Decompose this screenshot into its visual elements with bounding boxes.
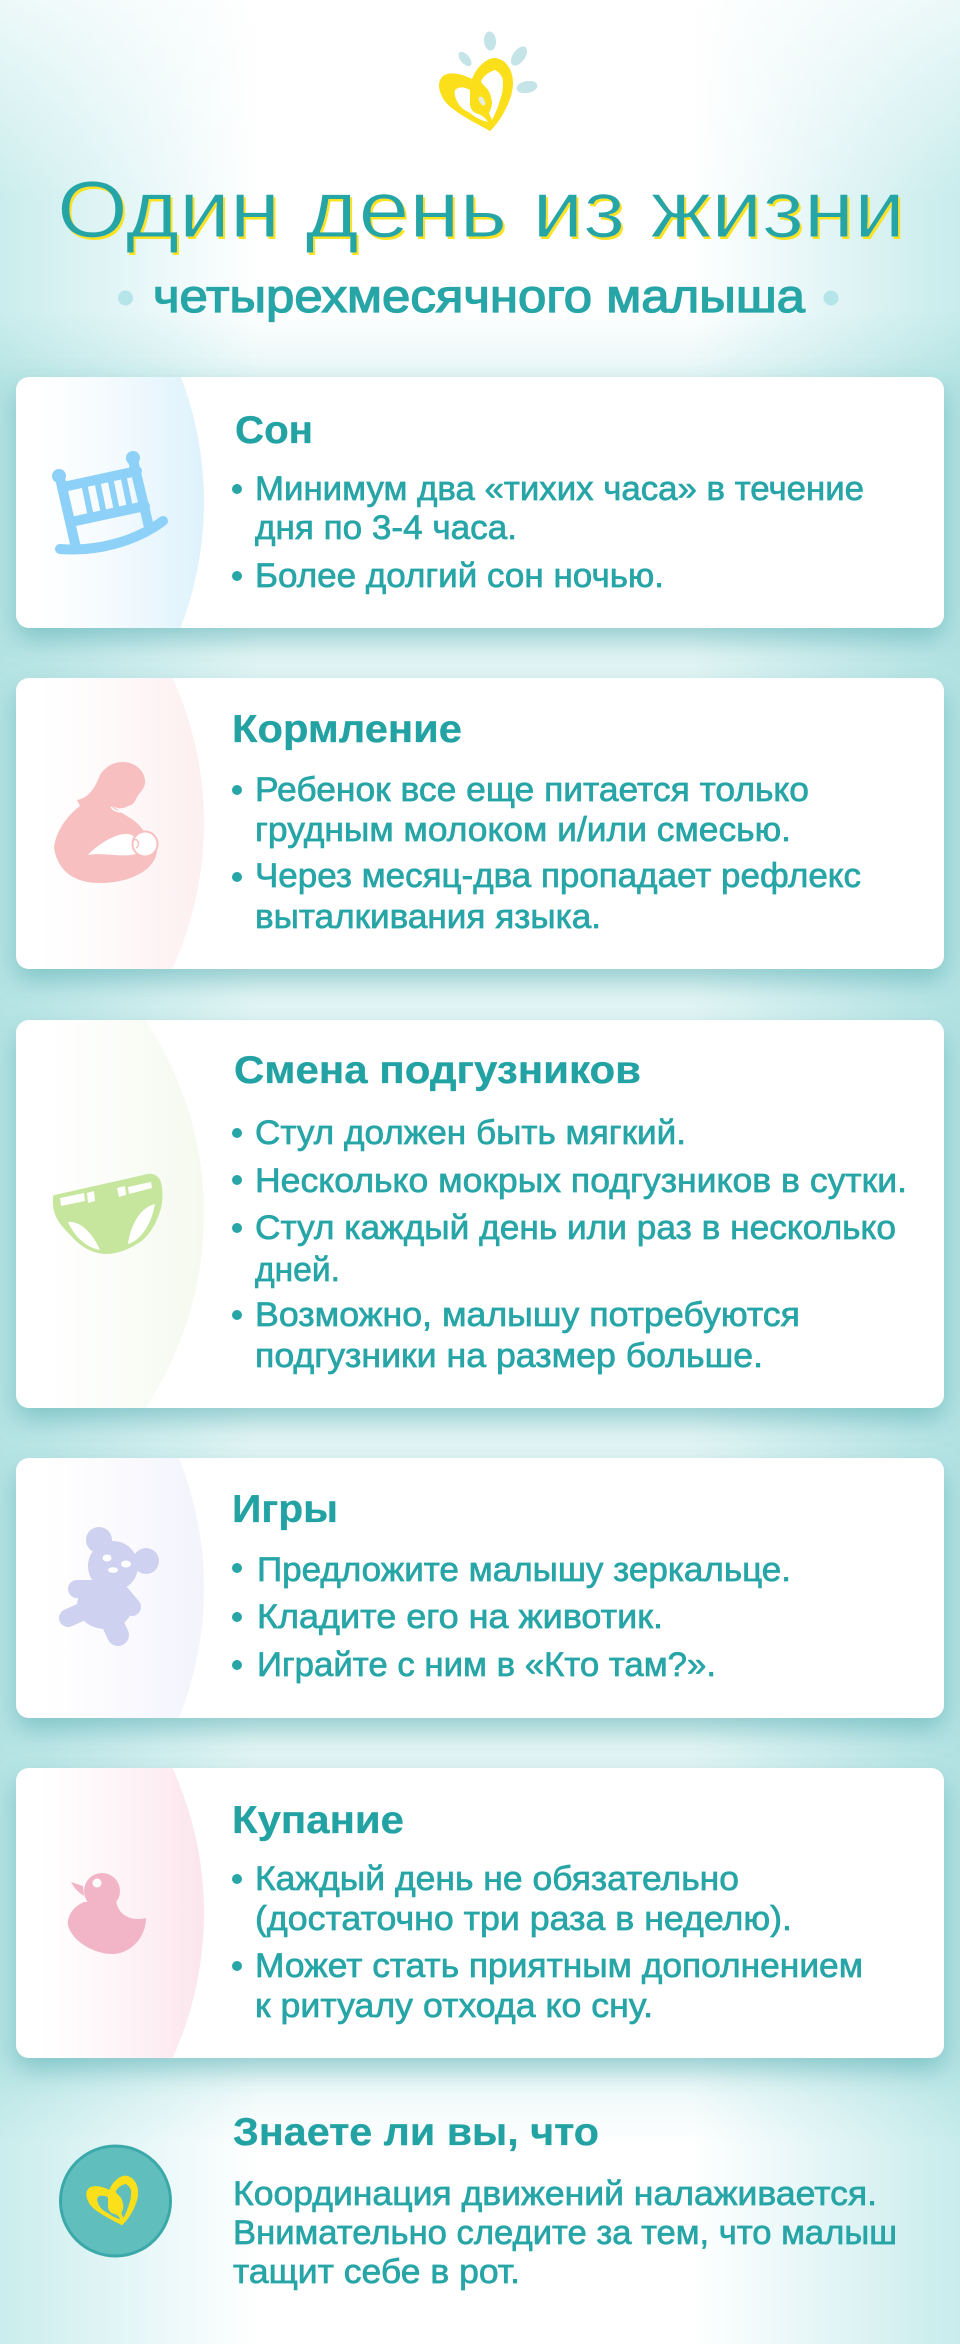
play bullet list (232, 1551, 791, 1684)
heading: bathing: Купание (232, 1799, 404, 1842)
icon: diaper (55, 1176, 160, 1252)
bathing bullet list (232, 1860, 863, 2025)
sleep bullet list: дня по 3-4 часа. (255, 509, 517, 547)
did you know text (233, 2175, 897, 2291)
icon: teddy bear (68, 1527, 159, 1635)
logo: yellow heart with rays (439, 31, 538, 131)
play bullet list: Кладите его на животик. (257, 1598, 663, 1636)
bathing bullet list: (достаточно три раза в неделю). (255, 1900, 792, 1938)
heading: feeding: Кормление (232, 708, 462, 751)
play bullet list: Предложите малышу зеркальце. (257, 1551, 791, 1589)
did you know text: Внимательно следите за тем, что малыш (233, 2214, 897, 2252)
bathing bullet list: к ритуалу отхода ко сну. (255, 1987, 653, 2025)
diaper bullet list: дней. (255, 1251, 340, 1289)
bathing bullet list: Может стать приятным дополнением (255, 1947, 863, 1985)
feeding bullet list: грудным молоком и/или смесью. (255, 811, 791, 849)
diaper bullet list: Возможно, малышу потребуются (255, 1296, 800, 1334)
panel: play (2, 1454, 958, 1746)
heading: sleep: Сон (235, 409, 313, 452)
diaper bullet list: Стул должен быть мягкий. (255, 1114, 686, 1152)
panel: diaper change (2, 1016, 958, 1436)
title: Один день из жизни (57, 165, 905, 255)
icon: rubber duck (68, 1873, 146, 1954)
diaper bullet list: подгузники на размер больше. (255, 1337, 763, 1375)
panel: did you know (60, 2111, 897, 2291)
icon: teal circle with heart (60, 2146, 170, 2256)
panel: bathing (2, 1764, 958, 2086)
subtitle with dots: четырехмесячного малыша (153, 270, 805, 322)
heading: play: Игры (232, 1488, 338, 1531)
feeding bullet list: выталкивания языка. (255, 898, 601, 936)
did you know text: тащит себе в рот. (233, 2253, 520, 2291)
sleep bullet list: Минимум два «тихих часа» в течение (255, 470, 864, 508)
sleep bullet list (232, 470, 864, 595)
bathing bullet list: Каждый день не обязательно (255, 1860, 739, 1898)
panel: sleep (2, 373, 958, 656)
icon: breastfeeding mother (54, 762, 158, 883)
heading: did you know: Знаете ли вы, что (233, 2111, 599, 2154)
sleep bullet list: Более долгий сон ночью. (255, 557, 664, 595)
diaper bullet list: Стул каждый день или раз в несколько (255, 1209, 896, 1247)
panel: feeding (2, 674, 958, 996)
feeding bullet list: Через месяц-два пропадает рефлекс (255, 857, 861, 895)
feeding bullet list (232, 771, 861, 936)
play bullet list: Играйте с ним в «Кто там?». (257, 1646, 716, 1684)
diaper bullet list (232, 1114, 907, 1375)
diaper bullet list: Несколько мокрых подгузников в сутки. (255, 1162, 907, 1200)
did you know text: Координация движений налаживается. (233, 2175, 877, 2213)
feeding bullet list: Ребенок все еще питается только (255, 771, 809, 809)
heading: diaper change: Смена подгузников (234, 1049, 641, 1092)
icon: rocking crib (52, 451, 163, 550)
